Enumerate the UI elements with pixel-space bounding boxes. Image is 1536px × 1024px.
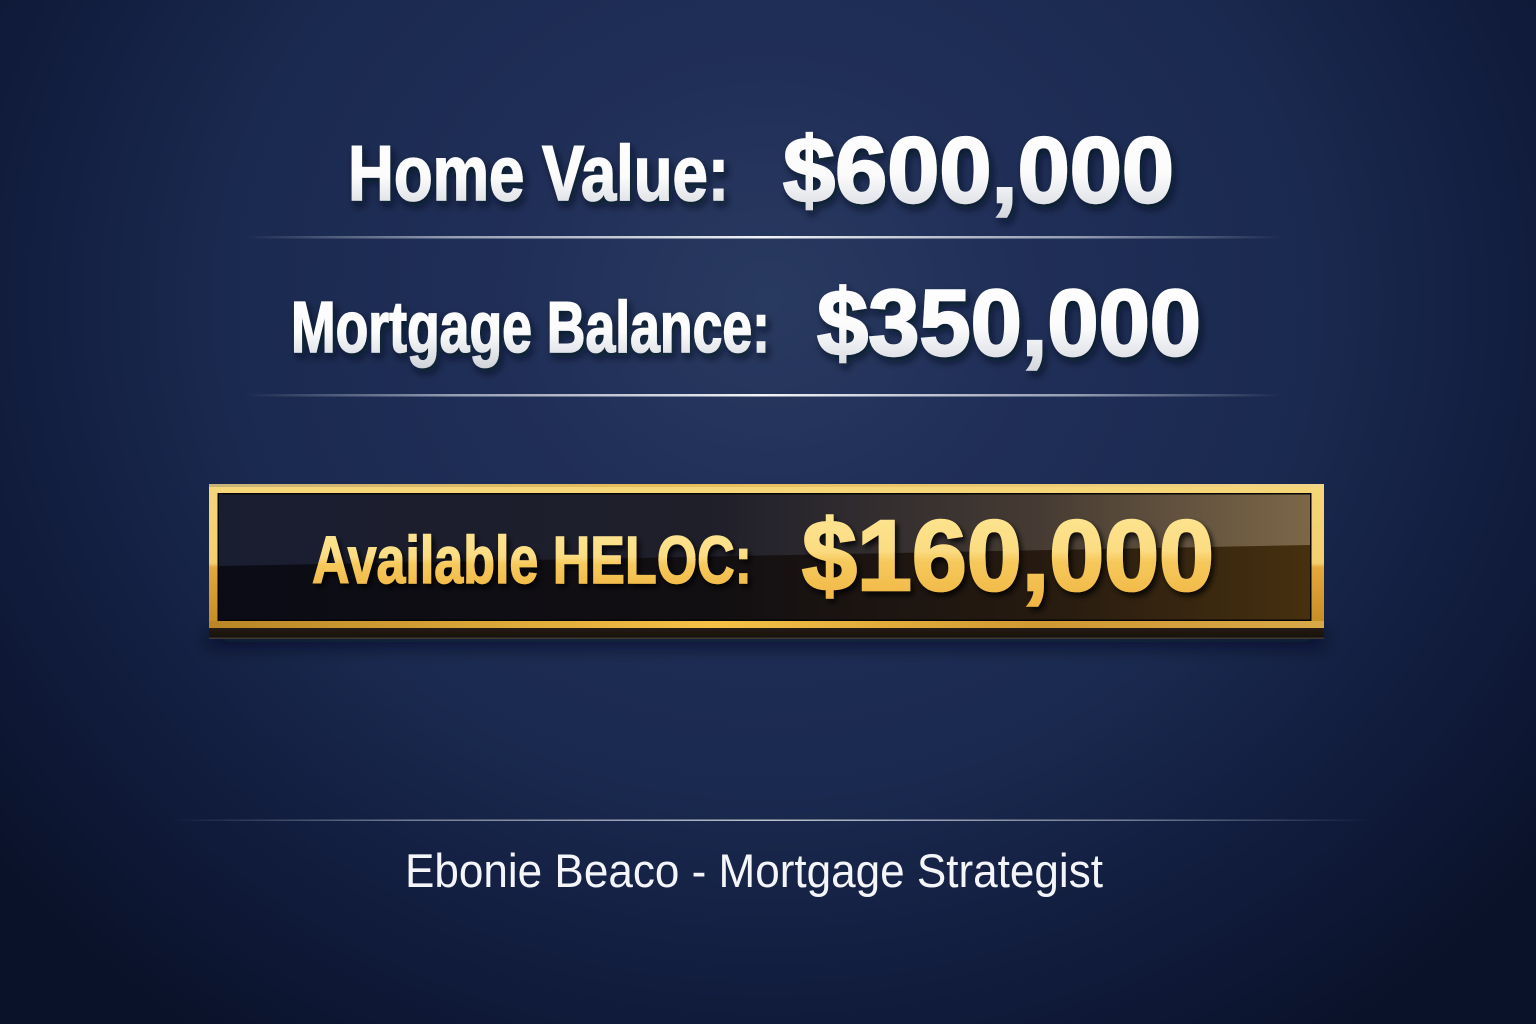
callout: available HELOC [209,484,1324,639]
label: mortgage balance: Mortgage Balance: [291,288,770,368]
gold frame [209,484,1324,628]
row: home value [348,118,1174,222]
label: home value: Home Value: [348,129,729,217]
amount: mortgage balance: $350,000 [817,270,1201,375]
dark inner panel [218,493,1312,621]
row: mortgage balance [291,270,1201,375]
footer credit: Ebonie Beaco - Mortgage Strategist [405,844,1103,897]
bar base edge [209,626,1324,639]
label: available HELOC: Available HELOC: [312,523,752,598]
amount: available HELOC: $160,000 [802,500,1214,612]
amount: home value: $600,000 [783,118,1174,222]
